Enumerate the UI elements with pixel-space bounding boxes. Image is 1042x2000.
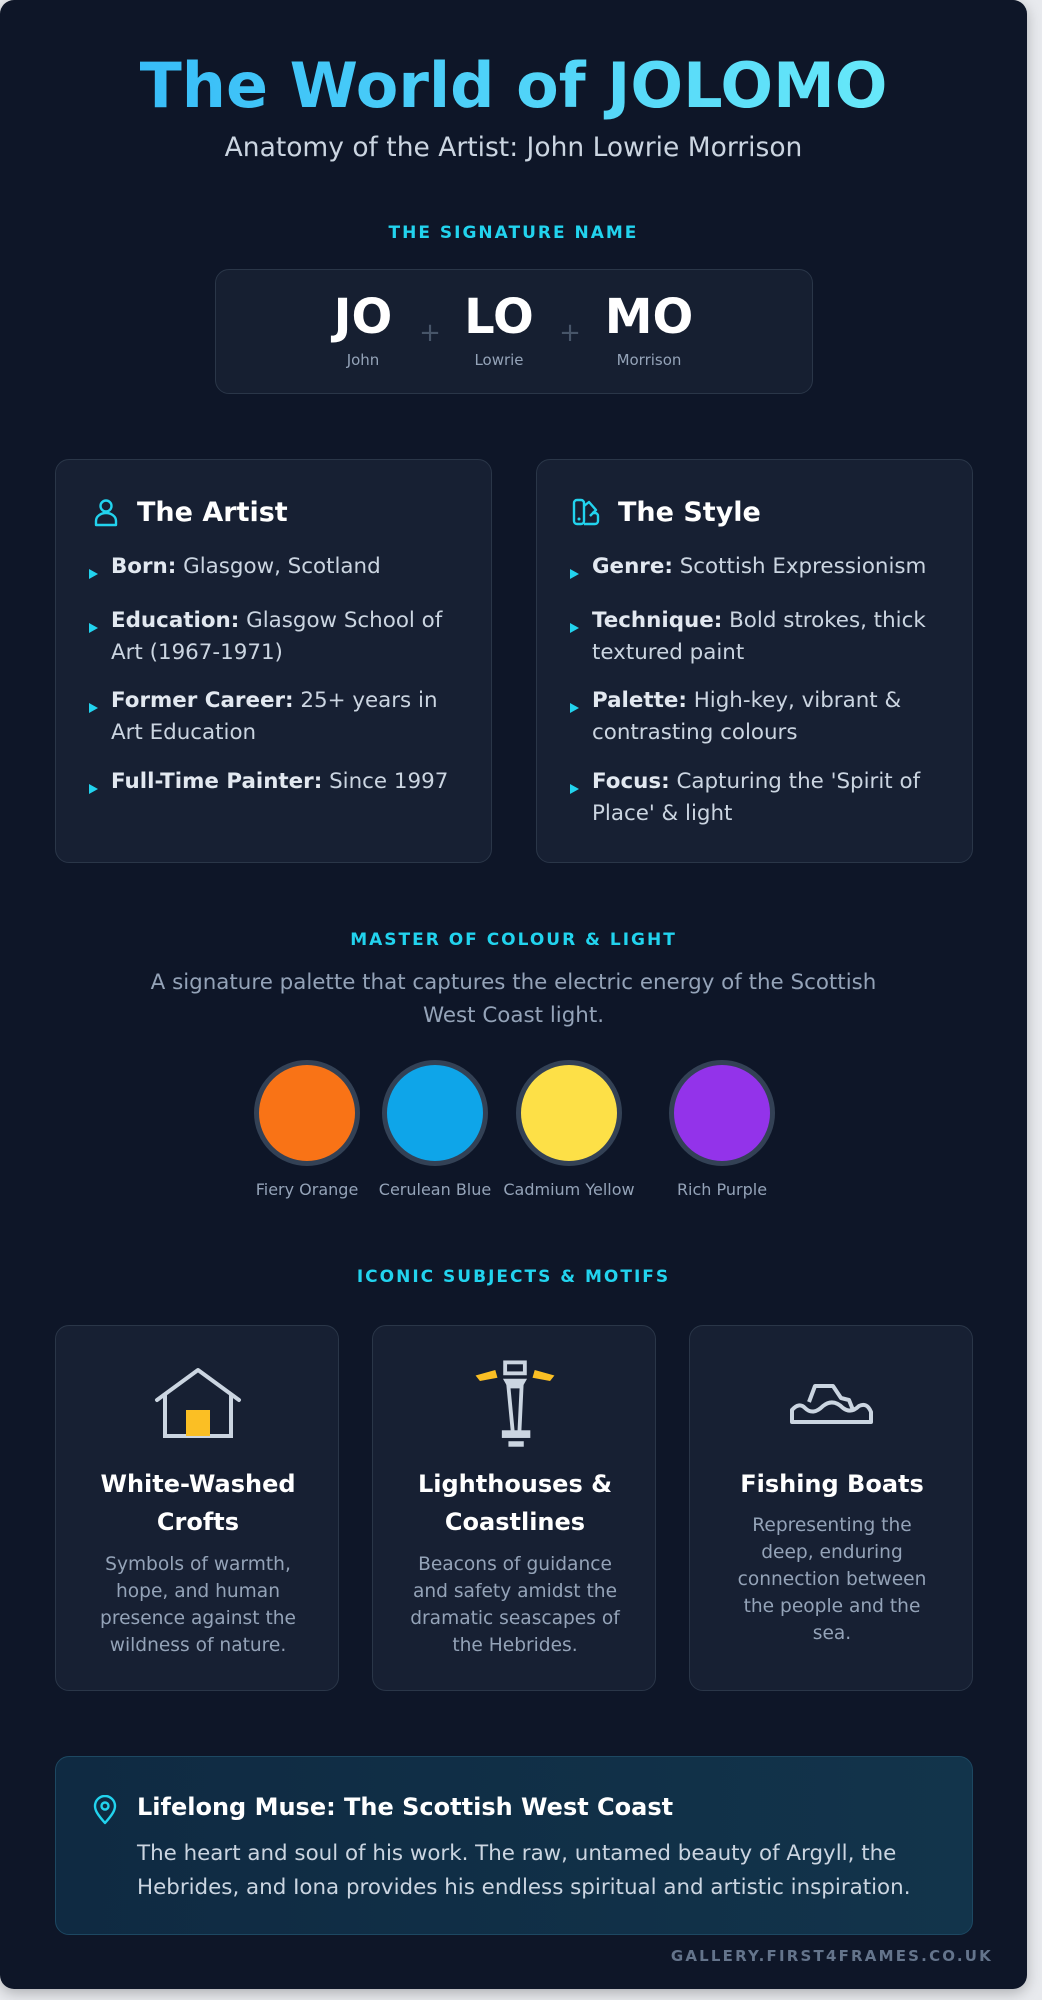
bullet list: Former Career: 25+ years in bbox=[111, 688, 438, 713]
heading: master of colour: MASTER OF COLOUR & LIGHT bbox=[350, 930, 677, 950]
title: White-Washed bbox=[100, 1470, 296, 1498]
bullet list: Full-Time Painter: Since 1997 bbox=[111, 769, 448, 794]
panel: crofts bbox=[55, 1325, 339, 1691]
description bbox=[410, 1554, 620, 1656]
description: Beacons of guidance bbox=[418, 1554, 612, 1575]
description: connection between bbox=[738, 1569, 926, 1590]
bullet list: textured paint bbox=[592, 640, 744, 665]
title bbox=[100, 1470, 296, 1536]
panel: signature name box bbox=[215, 269, 813, 394]
swatches bbox=[254, 1060, 775, 1199]
heading: The Style bbox=[618, 497, 761, 528]
swatch: purple bbox=[669, 1060, 775, 1199]
swatch: orange bbox=[254, 1060, 360, 1199]
text: palette description: West Coast light. bbox=[423, 1003, 604, 1028]
JO: John bbox=[347, 351, 379, 369]
text: palette description bbox=[150, 970, 876, 1028]
bullet list: Education: Glasgow School of bbox=[111, 608, 442, 633]
callout: lifelong muse bbox=[55, 1756, 973, 1935]
swatch: blue: Cerulean Blue bbox=[379, 1180, 491, 1199]
title: Fishing Boats bbox=[740, 1470, 924, 1498]
swatch: yellow bbox=[503, 1060, 635, 1199]
description bbox=[738, 1515, 926, 1644]
bullet list: Technique: Bold strokes, thick bbox=[592, 608, 926, 633]
title: Coastlines bbox=[445, 1508, 585, 1536]
title: Crofts bbox=[157, 1508, 239, 1536]
description: Symbols of warmth, bbox=[105, 1554, 291, 1575]
description: the people and the bbox=[744, 1596, 920, 1617]
bullet list: Art Education bbox=[111, 720, 256, 745]
text: The heart and soul of his work. The raw, untamed beauty of Argyll, the bbox=[137, 1841, 896, 1866]
panel: the artist bbox=[55, 459, 492, 863]
swatch: orange: Fiery Orange bbox=[256, 1180, 358, 1199]
panel: lighthouses bbox=[372, 1325, 656, 1691]
bullet list: Place' & light bbox=[592, 801, 732, 826]
subtitle: Anatomy of the Artist: John Lowrie Morrison bbox=[225, 132, 802, 163]
title bbox=[418, 1470, 612, 1536]
icon: lighthouse bbox=[476, 1360, 554, 1447]
bullet list: Palette: High-key, vibrant & bbox=[592, 688, 901, 713]
bullet list: Focus: Capturing the 'Spirit of bbox=[592, 769, 920, 794]
description bbox=[100, 1554, 296, 1656]
heading: The Artist bbox=[137, 497, 288, 528]
description: presence against the bbox=[100, 1608, 296, 1629]
description: Representing the bbox=[752, 1515, 912, 1536]
LO: Lowrie bbox=[474, 351, 524, 369]
description: sea. bbox=[813, 1623, 851, 1644]
icon: house bbox=[154, 1368, 242, 1438]
swatch: blue bbox=[379, 1060, 491, 1199]
plus: + bbox=[419, 318, 441, 348]
icon: person bbox=[94, 499, 118, 526]
description: deep, enduring bbox=[761, 1542, 903, 1563]
description: hope, and human bbox=[116, 1581, 280, 1602]
description: the Hebrides. bbox=[452, 1635, 578, 1656]
description: and safety amidst the bbox=[413, 1581, 617, 1602]
icon: palette swatches bbox=[572, 498, 600, 526]
text: Hebrides, and Iona provides his endless spiritual and artistic inspiration. bbox=[137, 1875, 910, 1900]
description: wildness of nature. bbox=[110, 1635, 286, 1656]
bullet list bbox=[89, 554, 448, 794]
JO: JO bbox=[334, 289, 392, 345]
text bbox=[136, 1841, 910, 1900]
bullet list bbox=[570, 554, 926, 826]
swatch: purple: Rich Purple bbox=[677, 1180, 767, 1199]
bullet list: contrasting colours bbox=[592, 720, 797, 745]
heading: signature name: THE SIGNATURE NAME bbox=[389, 223, 638, 243]
JO bbox=[330, 289, 392, 369]
footer: GALLERY.FIRST4FRAMES.CO.UK bbox=[671, 1947, 993, 1965]
plus: + bbox=[559, 318, 581, 348]
icon: boat bbox=[790, 1384, 873, 1424]
text: palette description: A signature palette that captures the electric energy of the Scottish bbox=[151, 970, 876, 995]
bullet list: Art (1967-1971) bbox=[111, 640, 283, 665]
swatch: yellow: Cadmium Yellow bbox=[503, 1180, 635, 1199]
heading: iconic subjects: ICONIC SUBJECTS & MOTIFS bbox=[357, 1267, 670, 1287]
bullet list: Genre: Scottish Expressionism bbox=[592, 554, 926, 579]
MO: Morrison bbox=[617, 351, 681, 369]
LO: LO bbox=[464, 289, 534, 345]
title: Lighthouses & bbox=[418, 1470, 612, 1498]
MO: MO bbox=[605, 289, 693, 345]
bullet list: Born: Glasgow, Scotland bbox=[111, 554, 381, 579]
description: dramatic seascapes of bbox=[410, 1608, 620, 1629]
panel: fishing boats bbox=[689, 1325, 973, 1691]
panel: the style bbox=[536, 459, 973, 863]
heading: Lifelong Muse: The Scottish West Coast bbox=[137, 1793, 673, 1821]
title: The World of JOLOMO bbox=[140, 49, 887, 122]
icon: map pin bbox=[94, 1795, 116, 1824]
